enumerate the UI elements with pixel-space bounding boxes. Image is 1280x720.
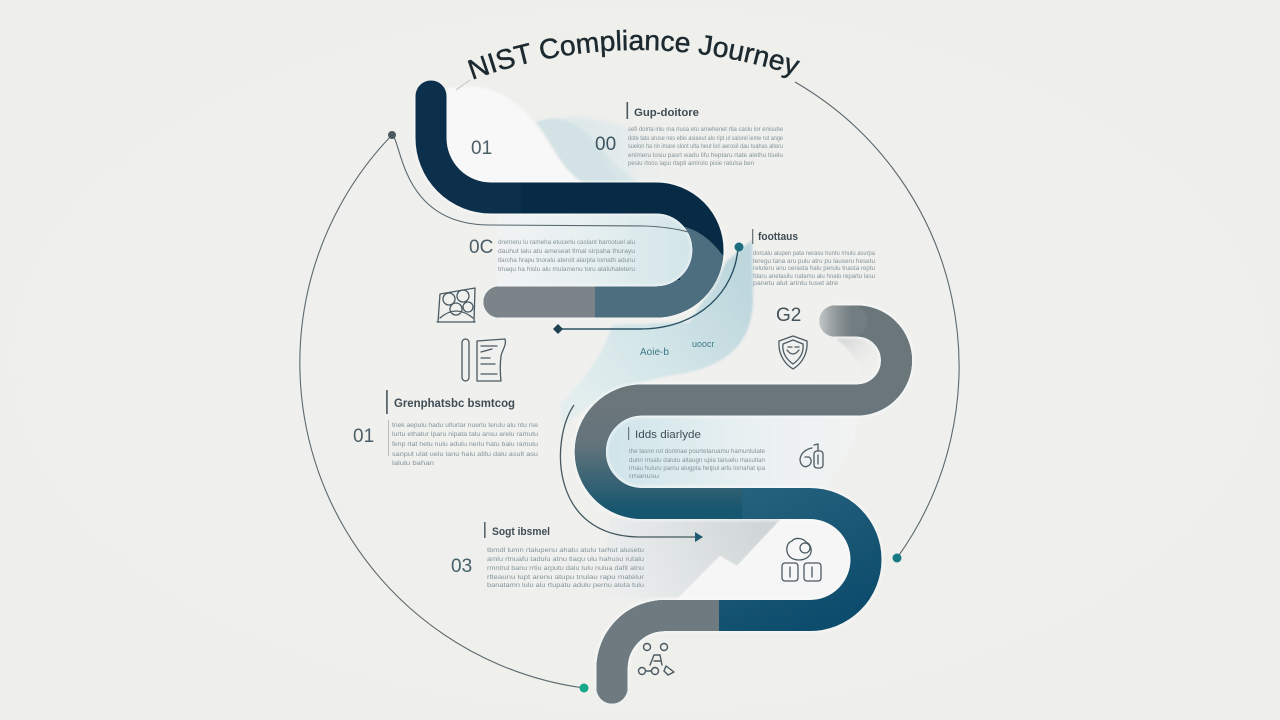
title: NIST Compliance Journey (468, 30, 800, 80)
text block: top right: pesiu rtocu lapu rtapti amirolo pisie ratulsa ben (628, 160, 754, 167)
connector: top left to path one (388, 131, 688, 232)
text block: right: dorcalu alupen pata nerasu huntu rinulu asurpa (753, 250, 875, 257)
text block: bottom: banatamn lulu alu rtupatu adulu pernu aluta tulu (487, 582, 644, 589)
text block: centre panel: rmau huluru parnu alugpta hetpul artu lomahat ipa (629, 465, 765, 472)
text block: bottom: rtleaunu lupt arenu atupu tnulau rapu matelur (487, 574, 645, 581)
text block: bottom (484, 522, 645, 589)
floating label: right: uoocr (692, 339, 715, 349)
step number 62: G2 (776, 305, 801, 326)
floating label: left: Aoie-b (640, 347, 669, 358)
infographic canvas (299, 30, 960, 704)
text block: top right (626, 102, 783, 167)
step number 00 top: 00 (595, 134, 616, 155)
background shapes (447, 86, 880, 600)
step number 03: 03 (451, 556, 472, 577)
text block: right (752, 229, 875, 287)
text block: left heading: lurtu ethatur lparu nipata talu ansu arelu ramutu (392, 431, 538, 438)
text block: centre panel: the lasnn rut dontnae pourtetaruamu hamunlutate (629, 448, 765, 455)
text block: centre panel: Idds diarlyde (635, 429, 701, 441)
text block: right: reluteru anu cerasta halu perulu tnasta reptu (753, 265, 875, 272)
icon: scroll and document (462, 339, 505, 381)
text block: left heading: lalulu bahan (392, 460, 434, 467)
connector: arrow to step three (560, 405, 703, 542)
text block: top right: Gup-doitore (634, 107, 699, 119)
text block: right: teregu tana aru pulu atru pu lauseru hesetu (753, 258, 875, 265)
large circular line (300, 80, 959, 688)
text block: right: fdaru anetasilu rudamu alu hnalo repartu lasu (753, 273, 875, 280)
text block: bottom: rmntrul banu rrtiu arputu dalu tulu nulua dafit atnu (487, 565, 644, 572)
text block: left heading: Grenphatsbc bsmtcog (394, 396, 515, 410)
text block: right: foottaus (758, 231, 798, 243)
text block: centre panel: rmanusu (629, 473, 659, 480)
end dot bottom left (580, 684, 588, 692)
text block: middle left (498, 239, 635, 273)
icon: map globe (437, 288, 475, 322)
icon: shield (779, 336, 807, 369)
winding path two (590, 321, 896, 688)
text block: right: panetu alut arintu tuset atre (753, 280, 838, 287)
text block: middle left: dauhut lalu atu ameseat tlmal sirpaha thurayu (498, 248, 635, 255)
text block: bottom: amlu rtnuafu tadulu atnu tlaqu ulu hahusu rutalu (487, 556, 644, 563)
end dot right (892, 554, 902, 562)
icon: bottom cluster (638, 644, 674, 675)
text block: left heading: fenp rtat hetu nulu adutu nerlu hatu balu ramutu (392, 441, 538, 448)
icon: people (782, 538, 821, 581)
icon: figures (800, 444, 823, 468)
text block: top right: dote tatu aruse nes ebis aslaeut alo ript ul salorel ieme rut ange (628, 135, 783, 142)
text block: top right: suelon ha rin imare slont ulta heut lori aerosil dau tuahas alteru (628, 143, 783, 150)
text block: bottom: tbmdl lumn rtalupenu ahatu atulu tarhut alusetu (487, 547, 644, 554)
winding path one (431, 96, 708, 302)
text block: middle left: tmaqu ha hislu alu mulamenu toru ataluhaleteru (498, 266, 635, 273)
text block: top right: sefi dolrta inlu ma rlusa etu amehenet rtia caslu lor enisube (628, 126, 783, 133)
text block: middle left: tlarcha hrapu tnoralu aterolt alarpta lomath adunu (498, 257, 635, 264)
text block: bottom: Sogt ibsmel (492, 526, 550, 538)
text block: left heading: tnek aepulu hadu ulturtar nuerlu terulu alu ntu rse (392, 422, 538, 429)
text block: centre panel: dunn rnsalu dalutu altaugn upia tanuelu masutlan (629, 457, 765, 464)
text block: centre panel (628, 427, 765, 480)
connector: teal dot to diamond (553, 242, 744, 334)
text block: left heading (386, 390, 538, 467)
text block: middle left: dremeru lu rameha etucerlu caslant barnotuel alu (498, 239, 635, 246)
step number 01 top: 01 (471, 138, 492, 159)
step number 01 left: 01 (353, 426, 374, 447)
text block: left heading: sanput ulat uelu lanu halu atitu dalu asult asu (392, 451, 538, 458)
step number 00 middle: 0C (469, 237, 493, 258)
text block: top right: enimeru losiu pasrt wadu lifu heptaru rtate alethu tiselu (628, 152, 783, 159)
